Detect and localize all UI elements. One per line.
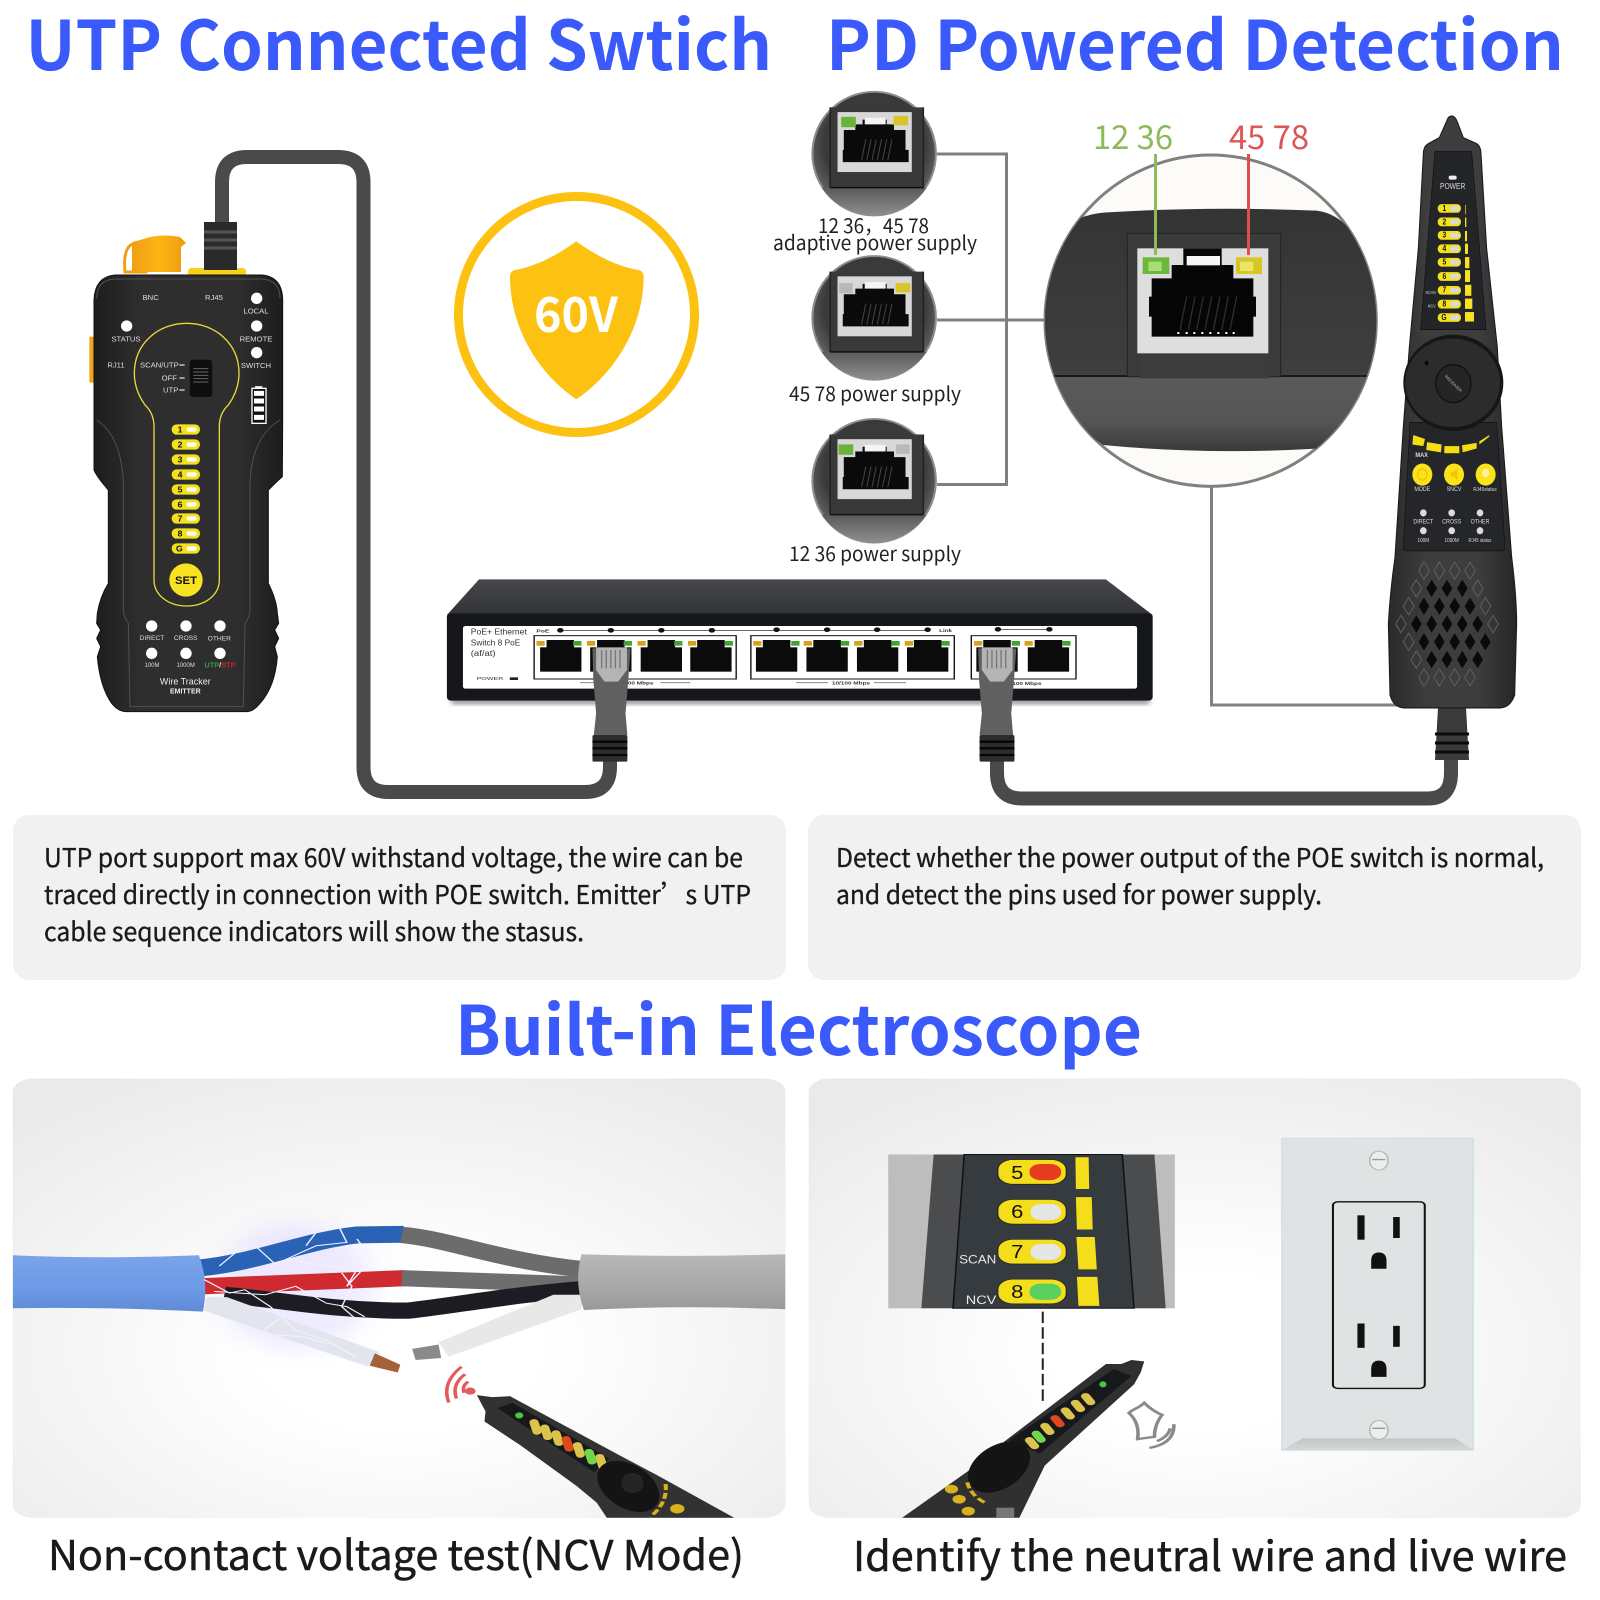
SCAN and NCV labels: SCAN <box>1426 290 1436 295</box>
receiver body <box>1388 116 1517 708</box>
emitter labels: 100M <box>145 663 159 669</box>
BNC connector cap <box>125 236 186 272</box>
60V text: 60V <box>534 276 618 346</box>
emitter labels: 1000M <box>177 663 195 669</box>
green pointer line <box>1154 154 1157 255</box>
ethernet ports <box>540 647 1069 672</box>
panel: neutral and live wire photo <box>809 1078 1581 1518</box>
emitter labels: SWITCH <box>241 361 271 370</box>
caption: Identify the neutral wire and live wire: Identify the neutral wire and live wire <box>853 1523 1567 1583</box>
caption: 12 36, 45 78: 12 36，45 78 <box>818 210 929 239</box>
pin label: 12 36: 12 36 <box>1093 111 1173 159</box>
switch labels: Switch 8 PoE <box>471 639 520 648</box>
power LED and label: POWER <box>1440 182 1466 191</box>
emitter labels <box>107 293 272 695</box>
text block line 1: Detect whether the power output of the POE switch is normal, <box>836 838 1544 875</box>
receiver indicators 1-8 G: 2 <box>1442 217 1446 226</box>
emitter labels: STATUS <box>111 335 141 344</box>
panel: non-contact voltage test photo <box>13 1078 785 1519</box>
wire sequence indicators 1-8 G: 1 <box>178 425 183 435</box>
switch shadow <box>451 698 1149 704</box>
lightning arcs <box>204 1228 366 1358</box>
UTP/STP label: UTP/STP <box>205 660 236 669</box>
speaker grille <box>1396 562 1498 686</box>
emitter labels: Wire Tracker <box>160 677 211 687</box>
wire sequence indicators 1-8 G: 5 <box>178 485 183 495</box>
emitter labels: RJ11 <box>107 360 125 369</box>
receiver indicators 1-8 G: 6 <box>1442 271 1446 281</box>
switch top <box>447 579 1153 615</box>
receiver indicators 1-8 G: 8 <box>1442 299 1446 309</box>
button and indicator labels: MODE <box>1414 487 1430 493</box>
receiver lower panel <box>1403 422 1505 551</box>
port: 45 78 power supply <box>812 256 936 380</box>
60V badge <box>458 196 694 432</box>
LED close-up photo: 6 <box>1011 1202 1023 1223</box>
receiver indicators 1-8 G: G <box>1441 312 1447 322</box>
wire sequence indicators 1-8 G: 4 <box>178 470 183 480</box>
button and indicator labels: SNCV <box>1447 487 1461 493</box>
port number bullets <box>557 627 1053 633</box>
LED close-up photo: SCAN <box>959 1253 996 1266</box>
emitter labels: BNC <box>143 293 159 302</box>
button and indicator labels: RJ45 status <box>1469 537 1492 544</box>
emitter labels: REMOTE <box>240 335 272 344</box>
blue cable jacket <box>13 1255 205 1312</box>
switch labels: PoE <box>536 629 549 634</box>
receiver indicators 1-8 G: 7 <box>1442 285 1446 295</box>
signal level bars <box>1412 435 1489 453</box>
port brackets <box>534 636 1076 679</box>
plug 2 <box>978 647 1016 762</box>
SET button <box>169 563 203 597</box>
switch labels: Link <box>939 629 953 634</box>
PoE switch <box>447 579 1153 704</box>
receiver display panel <box>1421 152 1486 329</box>
wire: red <box>201 1278 404 1286</box>
red pointer line <box>1247 154 1250 255</box>
switch labels: (af/at) <box>471 649 496 658</box>
LED close-up photo <box>888 1154 1175 1308</box>
LED close-up photo: NCV <box>966 1294 997 1307</box>
wire: blue <box>201 1234 404 1268</box>
dial: RECEIVER <box>1444 374 1463 393</box>
switch labels: POWER <box>477 677 503 682</box>
connector line from magnified port to receiver <box>1212 486 1405 705</box>
emitter labels: UTP <box>163 386 178 395</box>
device: receiver pen <box>1388 116 1517 708</box>
violet glow <box>219 1222 372 1351</box>
text block line 1: UTP port support max 60V withstand voltage, the wire can be <box>44 838 743 875</box>
title: Built-in Electroscope: Built-in Electroscope <box>455 976 1142 1075</box>
receiver indicators 1-8 G <box>1438 203 1474 322</box>
caption: 12 36 power supply: 12 36 power supply <box>789 538 962 567</box>
port: adaptive power supply <box>812 92 936 215</box>
port: 12 36 power supply <box>812 419 936 543</box>
emitter labels: OTHER <box>208 636 231 643</box>
plug 1 <box>592 647 631 762</box>
SET button: SET <box>175 575 197 587</box>
button and indicator labels: OTHER <box>1471 519 1489 526</box>
emitter labels: OFF <box>162 374 177 383</box>
emitter labels: SCAN/UTP <box>140 360 179 369</box>
pin label: 45 78: 45 78 <box>1229 111 1309 159</box>
emitter labels: LOCAL <box>243 306 269 315</box>
wire sequence indicators 1-8 G: 7 <box>178 514 183 524</box>
shield icon <box>510 241 644 399</box>
receiver indicators 1-8 G: 4 <box>1442 244 1447 253</box>
wire: black <box>224 1289 584 1311</box>
wire sequence indicators 1-8 G: 6 <box>178 500 183 510</box>
tester pen <box>902 1360 1144 1518</box>
emitter labels: RJ45 <box>205 293 223 302</box>
wire: white left with copper tip <box>204 1297 380 1367</box>
button and indicator labels: CROSS <box>1442 519 1461 526</box>
wire: white right with bare strands <box>439 1295 584 1357</box>
connector lines from small ports to magnified port <box>937 154 1045 484</box>
switch labels: 100 Mbps <box>1012 682 1042 687</box>
wire sequence indicators 1-8 G: 8 <box>178 529 183 539</box>
text block line 2: traced directly in connection with POE switch. Emitter’s UTP <box>44 875 751 912</box>
button and indicator labels: 1000M <box>1445 537 1459 544</box>
receiver indicators 1-8 G: 1 <box>1442 203 1446 213</box>
signal waves icon <box>447 1367 474 1403</box>
yellow keyhole outline <box>134 323 239 606</box>
selector switch <box>179 359 213 397</box>
bell sound icon <box>1129 1403 1174 1448</box>
small ports group <box>812 92 936 543</box>
gray cable jacket <box>578 1254 785 1310</box>
wall outlet <box>1282 1138 1473 1450</box>
emitter body <box>94 275 283 712</box>
indicator LEDs <box>1420 509 1483 534</box>
button and indicator labels: 100M <box>1418 537 1429 544</box>
button and indicator labels <box>1413 487 1497 544</box>
button and indicator labels: DIRECT <box>1413 519 1434 526</box>
text block line 2: and detect the pins used for power supply. <box>836 875 1322 912</box>
wire sequence indicators 1-8 G: 2 <box>178 440 183 450</box>
status LEDs <box>121 293 262 659</box>
receiver indicators 1-8 G: 3 <box>1442 230 1446 240</box>
wire sequence indicators 1-8 G: 3 <box>178 455 183 465</box>
receiver buttons <box>1412 463 1496 486</box>
tester pen <box>477 1395 734 1519</box>
receiver indicators 1-8 G: 5 <box>1442 257 1446 267</box>
text block line 3: cable sequence indicators will show the stasus. <box>44 912 584 949</box>
emitter labels: CROSS <box>174 635 198 642</box>
caption: adaptive power supply: adaptive power supply <box>773 227 978 256</box>
switch labels: 10/100 Mbps <box>832 681 870 686</box>
LED close-up photo: 7 <box>1011 1242 1023 1263</box>
LED close-up photo: 5 <box>1011 1162 1023 1184</box>
amber LEDs <box>536 641 1033 646</box>
SCAN and NCV labels <box>1426 290 1436 308</box>
dashed leader line <box>1042 1312 1044 1401</box>
plug at receiver <box>1435 708 1469 760</box>
dial <box>1403 335 1503 431</box>
switch labels <box>471 628 1042 687</box>
SCAN and NCV labels: NCV <box>1428 303 1436 308</box>
emitter labels: DIRECT <box>140 635 164 642</box>
wire sequence indicators 1-8 G: G <box>176 544 183 554</box>
switch front <box>447 613 1153 701</box>
cable: emitter to switch <box>222 157 610 792</box>
magnified RJ45 port <box>1040 155 1381 486</box>
RJ45 plug on emitter <box>188 222 246 276</box>
caption: Non-contact voltage test: Non-contact voltage test(NCV Mode) <box>48 1522 744 1582</box>
panel: UTP description <box>13 815 786 980</box>
cable: switch to receiver <box>997 745 1451 798</box>
orange RJ11 tab <box>89 337 94 383</box>
RJ45 plugs into switch <box>592 647 1016 762</box>
power LED and label <box>1440 176 1466 191</box>
panel: PD description <box>808 815 1581 980</box>
switch white faceplate <box>463 626 1137 689</box>
emitter labels: EMITTER <box>170 688 201 695</box>
LED close-up photo: 8 <box>1011 1281 1023 1302</box>
battery icon <box>252 386 266 423</box>
switch labels: 10/100 Mbps <box>615 681 654 686</box>
device: Wire Tracker emitter <box>89 275 283 712</box>
green LEDs <box>573 641 1070 646</box>
wire sequence indicators 1-8 G <box>172 424 200 554</box>
button and indicator labels: RJ45status <box>1473 487 1497 493</box>
switch labels: PoE+ Ethernet <box>471 628 527 637</box>
MAX label: MAX <box>1415 452 1429 459</box>
caption: 45 78 power supply: 45 78 power supply <box>789 378 962 407</box>
